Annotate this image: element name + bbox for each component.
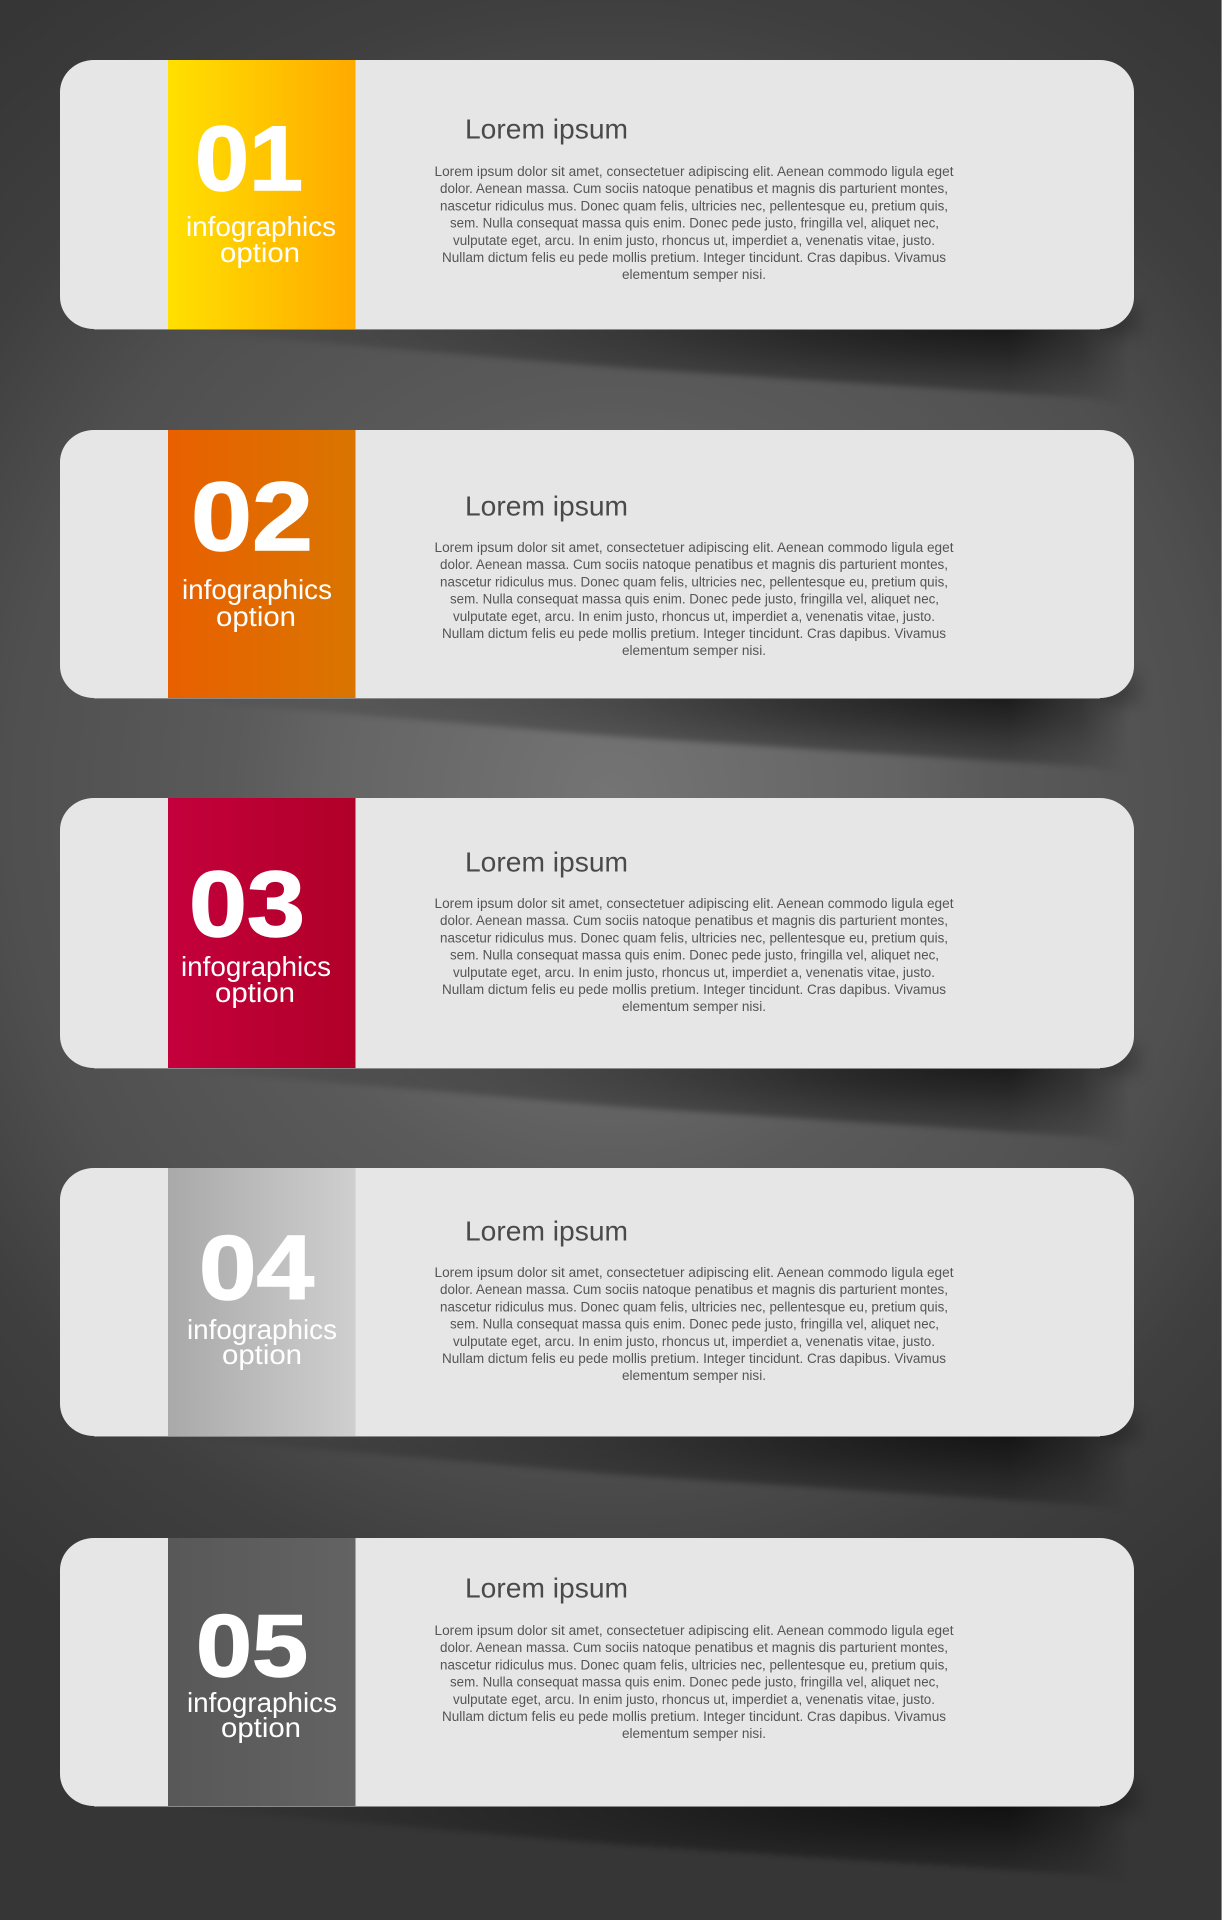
shadow under card 01: [94, 309, 1137, 396]
body text 02: [434, 540, 954, 658]
heading 01: Lorem ipsum: [465, 114, 628, 144]
body text 04: Nullam dictum felis eu pede mollis pretium. Integer tincidunt. Cras dapibus. Vivamus: [442, 1351, 946, 1366]
body text 03: elementum semper nisi.: [622, 999, 766, 1014]
stripe label 04: infographics: [187, 1314, 337, 1345]
body text 02: vulputate eget, arcu. In enim justo, rhoncus ut, imperdiet a, venenatis vitae, justo.: [453, 609, 935, 624]
body text 02: Lorem ipsum dolor sit amet, consectetuer adipiscing elit. Aenean commodo ligula eget: [434, 540, 954, 555]
card 01 body: [60, 60, 1134, 329]
body text 02: sem. Nulla consequat massa quis enim. Donec pede justo, fringilla vel, aliquet nec,: [450, 592, 939, 607]
stripe label 05: [187, 1687, 337, 1743]
body text 04: vulputate eget, arcu. In enim justo, rhoncus ut, imperdiet a, venenatis vitae, justo.: [453, 1334, 935, 1349]
colour stripe 05: [168, 1538, 356, 1806]
body text 03: dolor. Aenean massa. Cum sociis natoque penatibus et magnis dis parturient montes,: [440, 913, 948, 928]
body text 04: dolor. Aenean massa. Cum sociis natoque penatibus et magnis dis parturient montes,: [440, 1282, 948, 1297]
colour stripe 02: [168, 430, 356, 698]
body text 01: Nullam dictum felis eu pede mollis pretium. Integer tincidunt. Cras dapibus. Vivamus: [442, 250, 946, 265]
shadow under card 05: [94, 1789, 1134, 1870]
body text 02: nascetur ridiculus mus. Donec quam felis, ultricies nec, pellentesque eu, pretium quis,: [440, 574, 948, 589]
card 02 body: [60, 430, 1134, 698]
heading 05: Lorem ipsum: [465, 1572, 628, 1604]
panel: option 02: [60, 430, 1138, 774]
body text 05: [434, 1623, 954, 1741]
heading 03: Lorem ipsum: [465, 846, 628, 878]
colour stripe 01: [168, 60, 356, 329]
body text 01: elementum semper nisi.: [622, 267, 766, 282]
body text 03: Lorem ipsum dolor sit amet, consectetuer adipiscing elit. Aenean commodo ligula eget: [434, 896, 954, 911]
body text 05: Nullam dictum felis eu pede mollis pretium. Integer tincidunt. Cras dapibus. Vivamus: [442, 1709, 946, 1724]
body text 02: dolor. Aenean massa. Cum sociis natoque penatibus et magnis dis parturient montes,: [440, 557, 948, 572]
stripe label 03: option: [215, 977, 295, 1008]
shadow under card 02: [94, 676, 1139, 765]
stripe label 04: [187, 1314, 337, 1370]
stripe label 01: infographics: [186, 211, 336, 242]
stripe label 03: [181, 951, 331, 1008]
stripe label 05: option: [221, 1712, 301, 1743]
body text 03: sem. Nulla consequat massa quis enim. Donec pede justo, fringilla vel, aliquet nec,: [450, 948, 939, 963]
body text 05: elementum semper nisi.: [622, 1726, 766, 1741]
body text 04: nascetur ridiculus mus. Donec quam felis, ultricies nec, pellentesque eu, pretium quis,: [440, 1299, 948, 1314]
number 02: 02: [191, 462, 313, 571]
body text 05: nascetur ridiculus mus. Donec quam felis, ultricies nec, pellentesque eu, pretium quis,: [440, 1657, 948, 1672]
body text 05: dolor. Aenean massa. Cum sociis natoque penatibus et magnis dis parturient montes,: [440, 1640, 948, 1655]
colour stripe 04: [168, 1168, 356, 1436]
stripe label 02: infographics: [182, 574, 332, 605]
number 04: 04: [199, 1218, 314, 1319]
card 05 body: [60, 1538, 1134, 1806]
body text 03: Nullam dictum felis eu pede mollis pretium. Integer tincidunt. Cras dapibus. Vivamus: [442, 982, 946, 997]
body text 03: nascetur ridiculus mus. Donec quam felis, ultricies nec, pellentesque eu, pretium quis,: [440, 930, 948, 945]
panel: option 01: [60, 60, 1138, 405]
body text 01: nascetur ridiculus mus. Donec quam felis, ultricies nec, pellentesque eu, pretium quis,: [440, 198, 948, 213]
heading 02: Lorem ipsum: [465, 490, 628, 522]
body text 04: sem. Nulla consequat massa quis enim. Donec pede justo, fringilla vel, aliquet nec,: [450, 1317, 939, 1332]
body text 02: Nullam dictum felis eu pede mollis pretium. Integer tincidunt. Cras dapibus. Vivamus: [442, 626, 946, 641]
body text 03: [434, 896, 954, 1014]
shadow under card 03: [94, 1046, 1138, 1134]
stripe label 04: option: [222, 1339, 302, 1370]
stripe label 05: infographics: [187, 1687, 337, 1718]
body text 03: vulputate eget, arcu. In enim justo, rhoncus ut, imperdiet a, venenatis vitae, justo.: [453, 965, 935, 980]
body text 05: vulputate eget, arcu. In enim justo, rhoncus ut, imperdiet a, venenatis vitae, justo.: [453, 1692, 935, 1707]
card 03 body: [60, 798, 1134, 1068]
body text 01: vulputate eget, arcu. In enim justo, rhoncus ut, imperdiet a, venenatis vitae, justo.: [453, 233, 935, 248]
stripe label 03: infographics: [181, 951, 331, 982]
number 05: 05: [196, 1596, 308, 1695]
stripe label 02: option: [216, 601, 296, 632]
card 04 body: [60, 1168, 1134, 1436]
body text 01: [434, 164, 954, 282]
colour stripe 03: [168, 798, 356, 1068]
stripe label 02: [182, 574, 332, 632]
panel: option 03: [60, 798, 1138, 1144]
body text 05: Lorem ipsum dolor sit amet, consectetuer adipiscing elit. Aenean commodo ligula eget: [434, 1623, 954, 1638]
shadow under card 04: [94, 1417, 1136, 1501]
body text 04: [434, 1265, 954, 1383]
heading 04: Lorem ipsum: [465, 1216, 628, 1246]
body text 01: sem. Nulla consequat massa quis enim. Donec pede justo, fringilla vel, aliquet nec,: [450, 216, 939, 231]
panel: option 04: [60, 1168, 1138, 1512]
body text 04: elementum semper nisi.: [622, 1368, 766, 1383]
number 03: 03: [189, 852, 305, 956]
stripe label 01: option: [220, 237, 300, 268]
panel: option 05: [60, 1538, 1138, 1882]
body text 01: Lorem ipsum dolor sit amet, consectetuer adipiscing elit. Aenean commodo ligula eget: [434, 164, 954, 179]
body text 02: elementum semper nisi.: [622, 643, 766, 658]
number 01: 01: [195, 108, 303, 210]
body text 04: Lorem ipsum dolor sit amet, consectetuer adipiscing elit. Aenean commodo ligula eget: [434, 1265, 954, 1280]
stripe label 01: [186, 211, 336, 268]
body text 05: sem. Nulla consequat massa quis enim. Donec pede justo, fringilla vel, aliquet nec,: [450, 1675, 939, 1690]
body text 01: dolor. Aenean massa. Cum sociis natoque penatibus et magnis dis parturient montes,: [440, 181, 948, 196]
